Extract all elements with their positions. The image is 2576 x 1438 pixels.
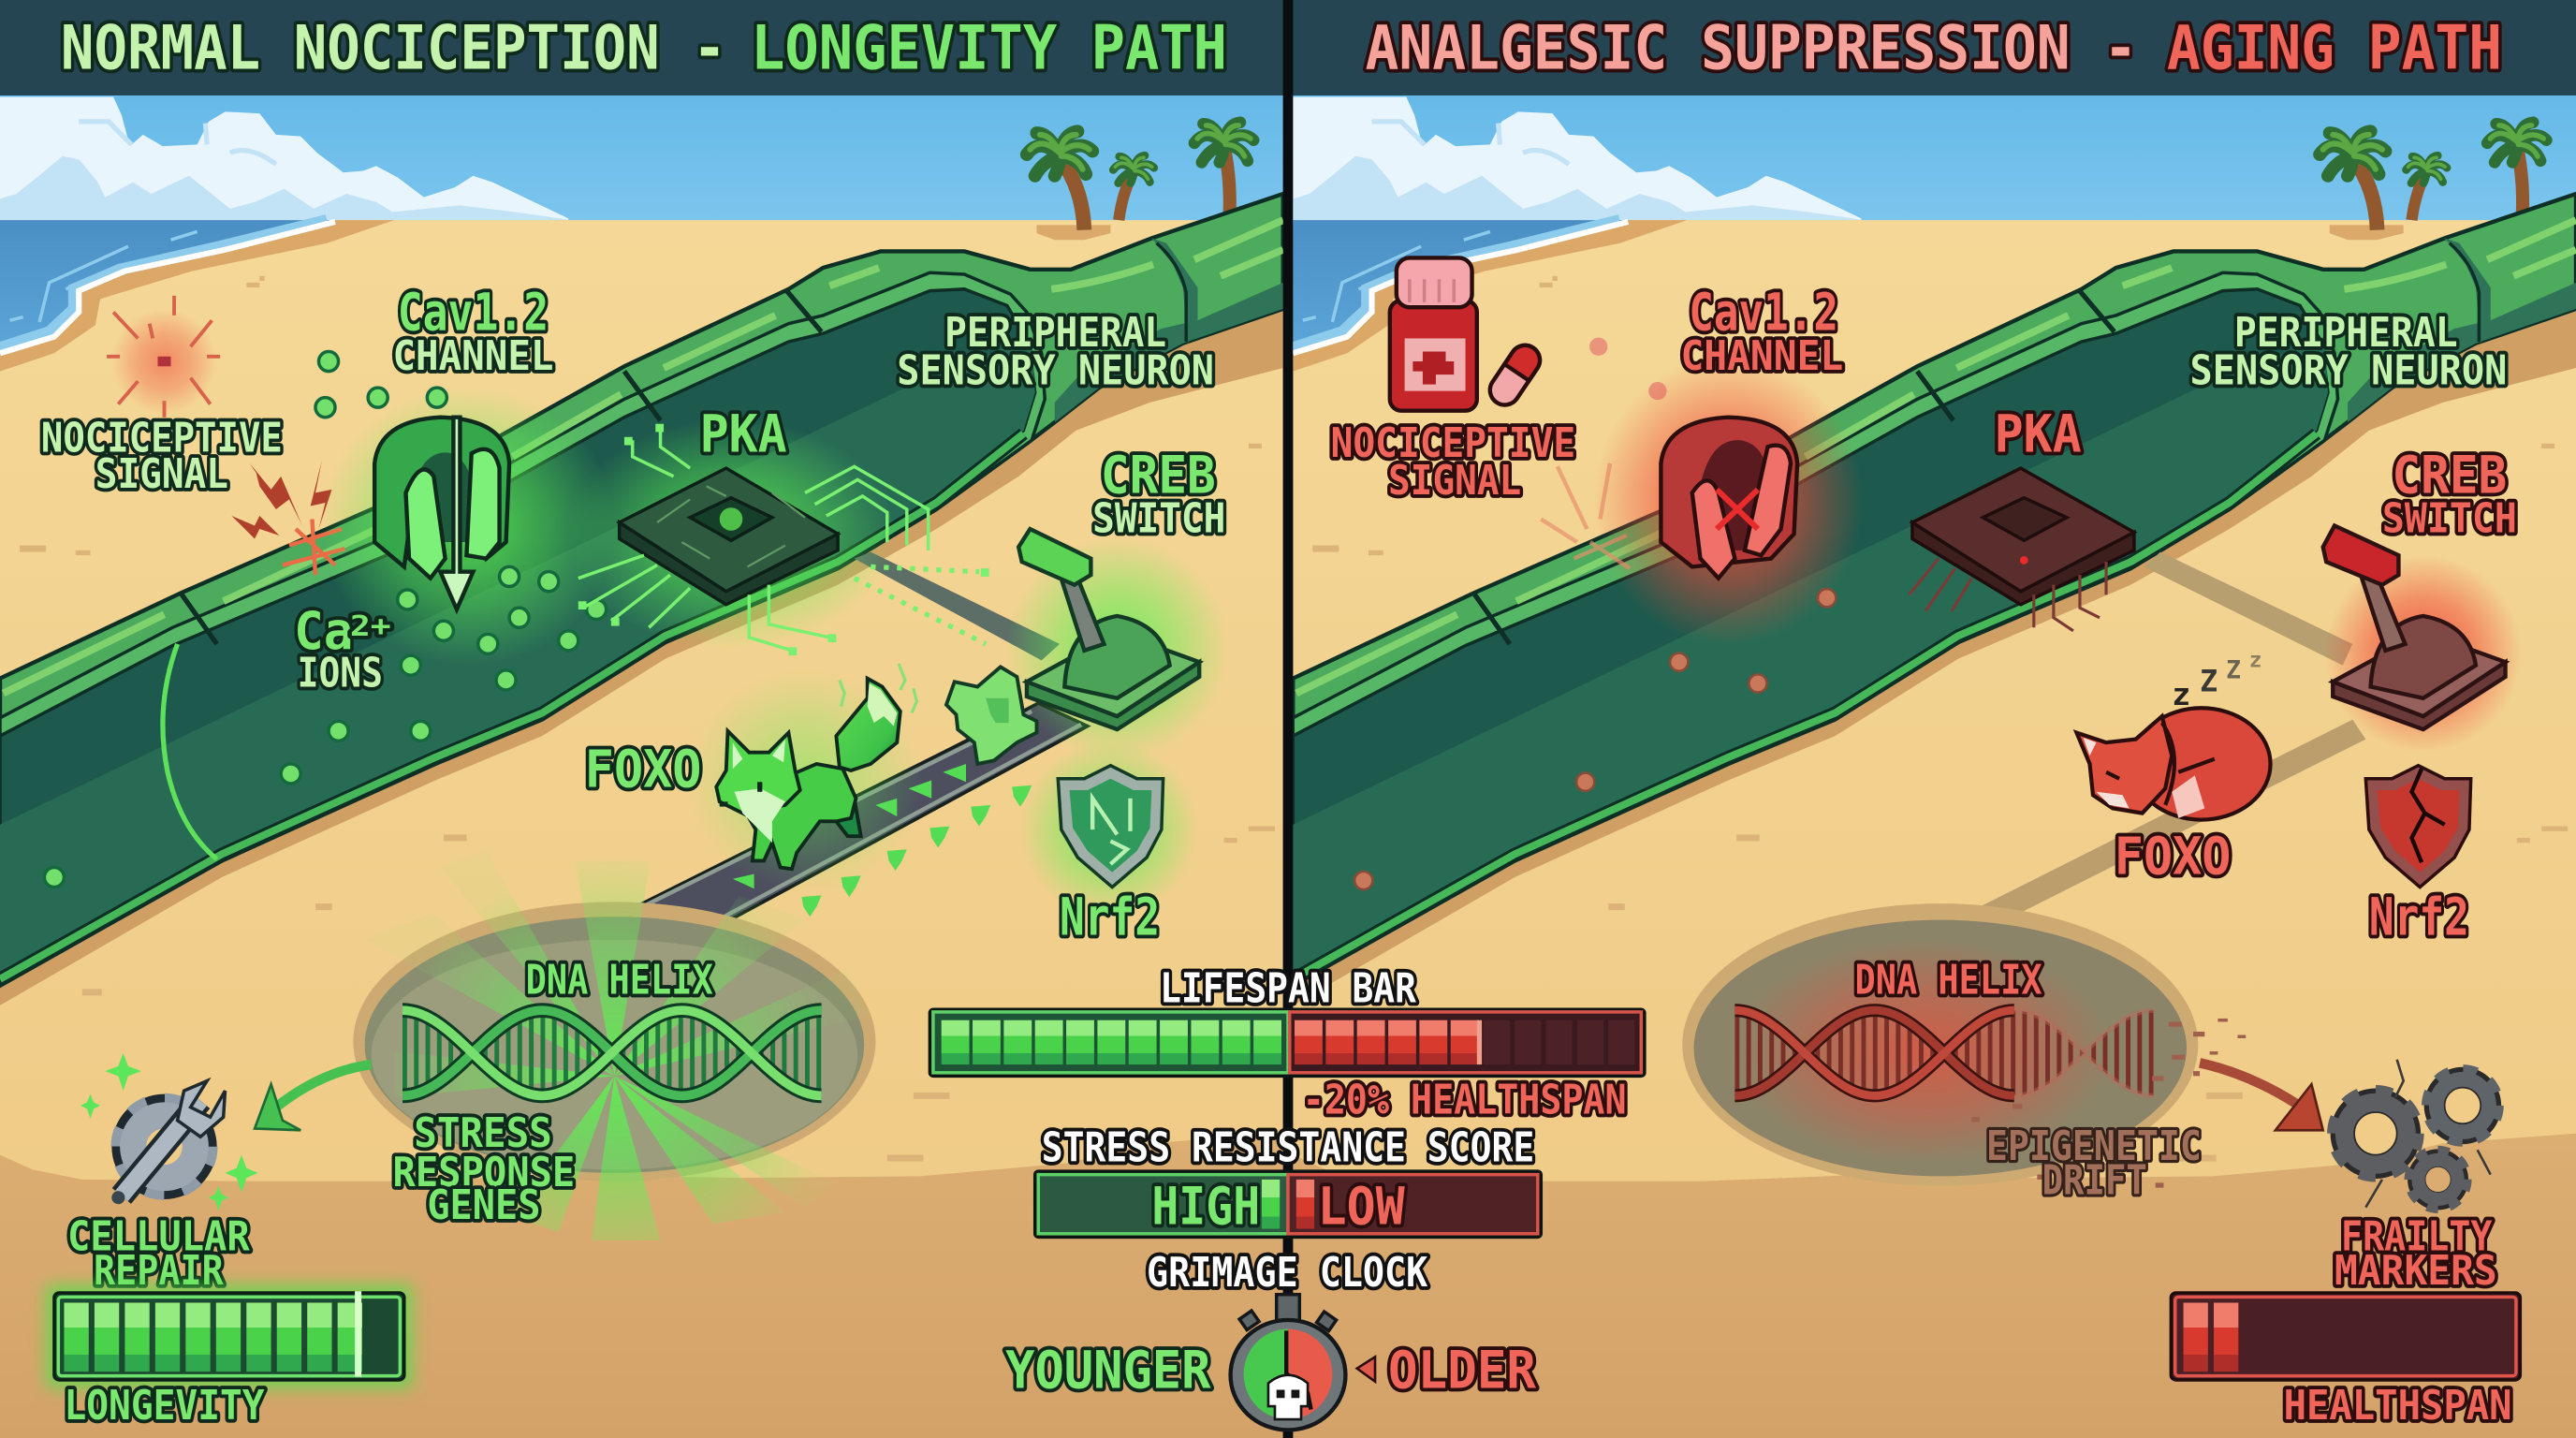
label: Cav1.2 channel [392, 284, 553, 380]
glow behind blocked channel [1593, 357, 1863, 646]
icon: faded pain signal [1541, 463, 1630, 568]
arrow: DNA to cellular repair [255, 1064, 372, 1130]
group: green signal arrows [733, 764, 1032, 917]
bar: stress resistance [1033, 1169, 1543, 1239]
label: lifespan bar: LIFESPAN BAR [1160, 965, 1417, 1012]
label: cellular repair: REPAIR [94, 1248, 225, 1295]
label: Ca2+ ions: Ca [294, 602, 353, 662]
label: CREB switch right: SWITCH [2382, 496, 2517, 543]
label: Cav1.2 channel right: CHANNEL [1680, 333, 1843, 380]
icon: PKA chip active [578, 424, 989, 655]
label: nociceptive signal: SIGNAL [95, 451, 228, 498]
road from CREB to DNA [639, 703, 1088, 927]
label: nociceptive signal: NOCICEPTIVE [41, 416, 283, 462]
fox aura [687, 668, 923, 892]
icon: capsule pill [1485, 340, 1545, 411]
label: stress response genes [392, 1110, 575, 1229]
icon: sleep Zs: z [2249, 648, 2261, 672]
title right: AGING PATH [2167, 14, 2502, 84]
panel: right aging path [1292, 0, 2576, 1438]
title left: NORMAL NOCICEPTION - [61, 14, 726, 84]
panel: center comparison metrics [929, 965, 1647, 1430]
label: longevity: LONGEVITY [64, 1383, 265, 1430]
label: epigenetic drift: EPIGENETIC [1986, 1123, 2202, 1170]
label: peripheral sensory neuron right [2190, 310, 2507, 395]
fox motion wisps [840, 664, 916, 713]
icon: CREB switch lever on [1018, 529, 1199, 729]
title left: LONGEVITY PATH [751, 14, 1227, 84]
label: Cav1.2 channel: CHANNEL [392, 333, 553, 380]
label: CREB switch: CREB [1101, 446, 1216, 506]
icon: analgesic pill bottle [1390, 257, 1477, 411]
label: CREB switch right [2382, 446, 2517, 543]
label: epigenetic drift [1986, 1123, 2202, 1205]
icon: CREB switch lever off [2323, 526, 2506, 729]
label: minus 20 percent healthspan: -20% HEALTHSPAN [1303, 1078, 1627, 1124]
label: peripheral sensory neuron [897, 310, 1214, 395]
label: DNA helix right: DNA HELIX [1855, 958, 2042, 1005]
icon: sleep Zs: Z [2226, 657, 2241, 685]
label: grimage clock: GRIMAGE CLOCK [1147, 1250, 1427, 1297]
label: CREB switch [1092, 446, 1225, 543]
dim road from PKA to CREB [2144, 552, 2352, 666]
DNA pit left [353, 902, 875, 1181]
icon: Nrf2 shield intact [1058, 766, 1164, 888]
label: stress response genes: RESPONSE [392, 1150, 575, 1196]
panel: left longevity path [0, 0, 1283, 1438]
label: frailty markers [2334, 1213, 2497, 1295]
label: frailty markers: MARKERS [2334, 1248, 2497, 1295]
label: stress response genes: GENES [427, 1182, 540, 1229]
label: Ca2+ ions: 2+ [350, 610, 391, 643]
header bar left [0, 0, 1283, 95]
icon: cellular repair wrench and gear [111, 1081, 225, 1204]
icon: frailty gears broken [2333, 1060, 2499, 1209]
label: high: HIGH [1151, 1177, 1260, 1237]
label: Cav1.2 channel: Cav1.2 [398, 284, 549, 344]
beach and neuron background left [0, 95, 1283, 1438]
icon: Cav1.2 channel open [374, 418, 509, 609]
center divider [1283, 0, 1293, 1438]
icon: DNA helix decaying [1734, 1010, 2246, 1188]
label: peripheral sensory neuron: SENSORY NEURON [897, 348, 1214, 395]
glow behind PKA [567, 418, 896, 649]
arrow: toward older [1357, 1357, 1375, 1382]
label: PKA: PKA [700, 405, 787, 465]
arrow: DNA to frailty [2200, 1063, 2323, 1130]
DNA pit right [1682, 903, 2198, 1186]
label: younger: YOUNGER [1005, 1342, 1211, 1401]
icon: FOXO fox active [716, 679, 900, 869]
icon: sleeping FOXO fox [2076, 708, 2271, 820]
group: calcium ions [44, 352, 607, 888]
label: Ca2+ ions: IONS [298, 650, 383, 697]
label: Cav1.2 channel right [1680, 284, 1843, 380]
label: frailty markers: FRAILTY [2341, 1213, 2492, 1260]
label: healthspan: HEALTHSPAN [2284, 1383, 2512, 1430]
label: peripheral sensory neuron right: PERIPHERAL [2234, 310, 2458, 357]
header bar right [1293, 0, 2576, 95]
light rays from DNA [365, 851, 871, 1240]
icon: DNA helix green [402, 1010, 822, 1095]
label: nociceptive signal [41, 416, 283, 498]
dim road from CREB to DNA [1980, 720, 2365, 917]
label: cellular repair [67, 1213, 251, 1295]
group: stalled calcium dots [1354, 338, 1836, 889]
bar: healthspan [2171, 1293, 2520, 1380]
glow behind off lever [2324, 555, 2522, 753]
glow behind channel [320, 386, 616, 666]
label: epigenetic drift: DRIFT [2042, 1158, 2147, 1205]
label: stress response genes: STRESS [414, 1110, 552, 1157]
icon: sleep Zs [2172, 648, 2261, 712]
label: nociceptive signal right: SIGNAL [1388, 458, 1521, 505]
beach and neuron background right [1292, 95, 2576, 1438]
label: Ca2+ ions [294, 602, 391, 697]
membrane curve left [163, 644, 217, 859]
road from PKA to CREB [855, 552, 1060, 660]
title left [61, 14, 1227, 84]
label: DNA helix: DNA HELIX [526, 958, 713, 1005]
label: FOXO: FOXO [585, 741, 701, 800]
label: PKA right: PKA [1995, 405, 2082, 465]
icon: pain lightning [231, 460, 345, 575]
glow behind shield [1020, 741, 1197, 918]
title right: ANALGESIC SUPPRESSION - [1365, 14, 2137, 84]
icon: repair sparkles [80, 1053, 258, 1211]
glow behind lever [1005, 537, 1229, 760]
icon: sleep Zs: Z [2200, 666, 2217, 699]
label: CREB switch: SWITCH [1092, 496, 1225, 543]
bar: longevity [46, 1284, 413, 1388]
icon: small green creature [946, 667, 1036, 764]
label: nociceptive signal right: NOCICEPTIVE [1331, 420, 1575, 467]
icon: grimage stopwatch [1231, 1295, 1345, 1430]
label: nociceptive signal right [1331, 420, 1575, 505]
label: peripheral sensory neuron right: SENSORY NEURON [2190, 348, 2507, 395]
label: Nrf2 right: Nrf2 [2369, 888, 2469, 947]
icon: Nrf2 shield cracked [2365, 766, 2471, 888]
icon: Cav1.2 channel blocked [1661, 418, 1797, 579]
icon: sleep Zs: z [2172, 676, 2190, 712]
icon: nociceptive signal starburst [107, 296, 220, 418]
bar: lifespan [929, 1008, 1647, 1078]
label: Cav1.2 channel right: Cav1.2 [1689, 284, 1838, 344]
label: Nrf2: Nrf2 [1060, 888, 1160, 947]
label: cellular repair: CELLULAR [67, 1213, 251, 1260]
label: older: OLDER [1388, 1342, 1537, 1401]
label: FOXO right: FOXO [2115, 828, 2231, 888]
label: peripheral sensory neuron: PERIPHERAL [944, 310, 1166, 357]
icon: PKA chip inactive [1909, 468, 2134, 631]
label: stress resistance score: STRESS RESISTANCE SCORE [1042, 1125, 1534, 1172]
label: CREB switch right: CREB [2392, 446, 2507, 506]
label: low: LOW [1318, 1177, 1405, 1237]
